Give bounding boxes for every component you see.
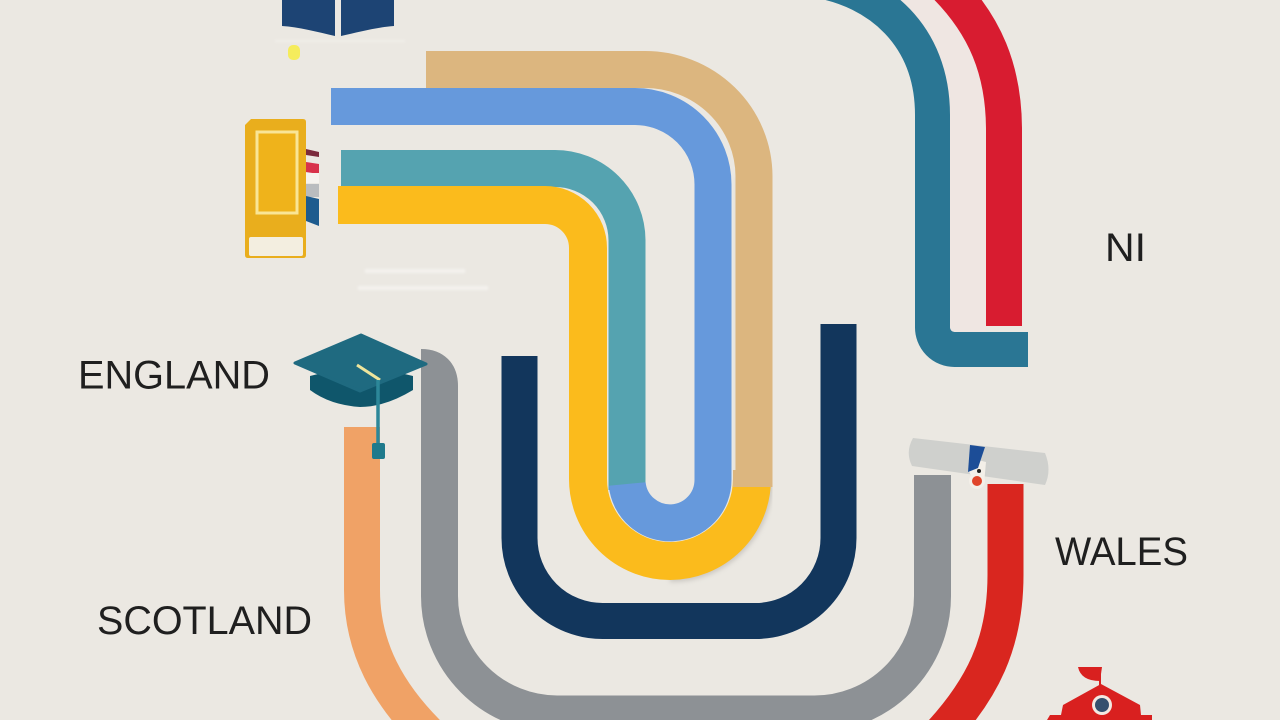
pathway: light teal	[341, 168, 627, 490]
label: England: ENGLAND	[78, 354, 270, 398]
pathway: tan	[426, 70, 754, 479]
soft shadow under central pipes	[670, 176, 755, 564]
pathway: yellow	[338, 205, 752, 561]
pathway: navy	[520, 324, 838, 621]
label: NI: NI	[1105, 226, 1146, 270]
label: Wales: WALES	[1055, 530, 1188, 574]
decorative faded text marks	[358, 271, 488, 288]
pathway: Wales red	[930, 484, 1006, 720]
label: Scotland: SCOTLAND	[97, 599, 312, 643]
pathway: NI teal	[815, 0, 1028, 350]
pathway: blue	[331, 106, 713, 523]
NI pale halo between pipes	[895, 0, 968, 332]
icon: open book	[275, 0, 405, 60]
pathway: orange	[362, 427, 440, 720]
pathway: NI red	[945, 0, 1004, 326]
icon: graduation cap	[295, 335, 426, 459]
icon: yellow book with flag stripes	[245, 119, 319, 258]
icon: red school building	[1047, 667, 1152, 720]
icon: diploma scroll	[909, 438, 1048, 489]
tan overlap above yellow end	[733, 470, 772, 487]
pathway: grey	[421, 368, 932, 714]
